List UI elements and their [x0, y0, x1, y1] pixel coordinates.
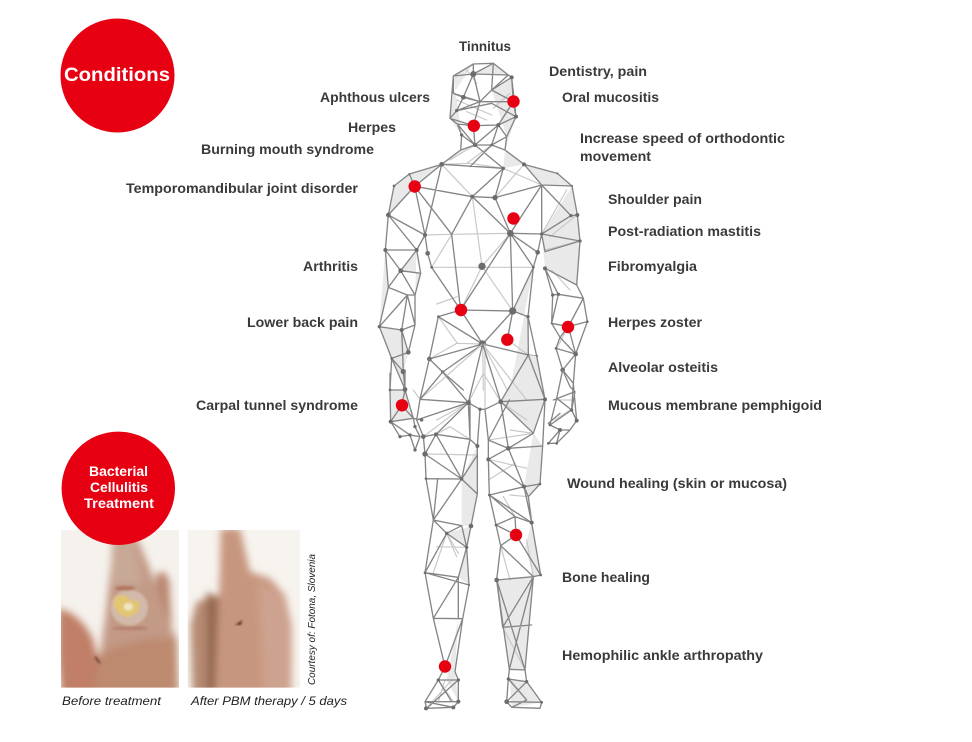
label: Carpal tunnel syndrome: Carpal tunnel syndrome	[196, 397, 358, 413]
label: Oral mucositis: Oral mucositis	[562, 89, 659, 105]
photo: before treatment	[58, 530, 179, 695]
photo: after PBM therapy	[188, 528, 300, 695]
heading badge: Conditions	[60, 18, 174, 132]
heading badge: Bacterial Cellulitis Treatment: Cellulitis	[90, 480, 148, 495]
label: Alveolar osteitis: Alveolar osteitis	[608, 359, 718, 375]
photo credit: Courtesy of: Fotona, Slovenia	[307, 554, 318, 685]
label: Bone healing: Bone healing	[562, 569, 650, 585]
heading badge: Conditions: Conditions	[64, 65, 170, 86]
label: Fibromyalgia: Fibromyalgia	[608, 258, 697, 274]
label: Increase speed of orthodontic movement: movement	[580, 148, 651, 164]
heading badge: Bacterial Cellulitis Treatment: Bacterial	[89, 464, 148, 479]
label: Increase speed of orthodontic movement	[580, 130, 785, 164]
red marker dots	[396, 95, 574, 673]
human body mesh figure	[378, 63, 589, 710]
upper body mesh	[378, 63, 589, 392]
label: Herpes: Herpes	[348, 119, 396, 135]
label: Wound healing (skin or mucosa): Wound healing (skin or mucosa)	[567, 475, 787, 491]
label: Arthritis: Arthritis	[303, 258, 358, 274]
label: Herpes zoster: Herpes zoster	[608, 314, 703, 330]
label: Lower back pain: Lower back pain	[247, 314, 358, 330]
label: Temporomandibular joint disorder: Temporomandibular joint disorder	[126, 180, 359, 196]
label: Post-radiation mastitis: Post-radiation mastitis	[608, 223, 761, 239]
label: Aphthous ulcers: Aphthous ulcers	[320, 89, 430, 105]
caption: before treatment: Before treatment	[62, 694, 162, 708]
label: Hemophilic ankle arthropathy: Hemophilic ankle arthropathy	[562, 647, 763, 663]
label: Shoulder pain: Shoulder pain	[608, 191, 702, 207]
label: Mucous membrane pemphigoid: Mucous membrane pemphigoid	[608, 397, 822, 413]
label: Tinnitus: Tinnitus	[459, 38, 511, 54]
label: Burning mouth syndrome: Burning mouth syndrome	[201, 141, 374, 157]
heading badge: Bacterial Cellulitis Treatment: Treatment	[84, 496, 155, 511]
label: Increase speed of orthodontic movement: Increase speed of orthodontic	[580, 130, 785, 146]
caption: after PBM therapy: After PBM therapy / 5 days	[190, 694, 347, 708]
label: Dentistry, pain: Dentistry, pain	[549, 63, 647, 79]
lower body mesh	[389, 344, 579, 710]
heading badge: Bacterial Cellulitis Treatment	[62, 432, 175, 545]
